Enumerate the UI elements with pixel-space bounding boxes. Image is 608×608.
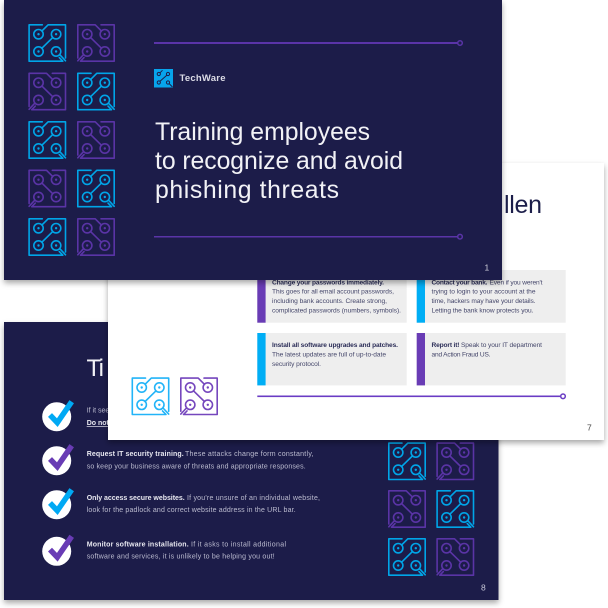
tip 4 text [87,542,286,561]
tip 3 text: If you're unsure of an individual website, [187,495,320,502]
tip 4 text: If it asks to install additional [191,542,286,549]
slide 7 background [108,163,604,440]
top divider with node [154,41,462,45]
brand name: TechWare [180,73,226,84]
tip 2 text [87,451,314,470]
tip 2 text: Request IT security training. [87,451,184,458]
tip 4 text: software and services, it is unlikely to be helping you out! [87,554,275,561]
slide 8 page number: 8 [481,583,486,593]
tip 3 text: Only access secure websites. [87,495,185,502]
panel: slide 1 title [4,0,502,280]
bottom divider with node [154,234,462,239]
slide 8 heading: Ti [86,355,104,382]
card: contact bank: trying to login to your account at the [432,289,536,296]
tip 2 text: These attacks change form constantly, [185,451,314,458]
panel: slide 8 tips [4,322,498,600]
main title: to recognize and avoid [155,148,403,175]
slide 1 page number: 1 [484,263,490,273]
card: install upgrades: Install all software upgrades and patches. [272,342,398,349]
card: change passwords: complicated passwords (numbers, symbols). [272,307,401,314]
slide 7 heading: llen [504,191,542,219]
tip 3 check icon [42,490,72,519]
tip 3 text: look for the padlock and correct website address in the URL bar. [87,507,296,514]
card: install upgrades [257,333,407,385]
main title [155,119,403,204]
tip 4 check icon [42,536,72,566]
tip 2 check icon [42,446,72,475]
tip 2 text: so keep your business aware of threats and appropriate responses. [87,463,306,470]
icon: blue circuit [132,378,169,414]
card: contact bank: Letting the bank know protects you. [432,307,534,314]
card: change passwords: Change your passwords immediately. [272,279,384,286]
slide 8 circuit icon grid [389,443,473,575]
slide 7 page number: 7 [587,423,592,433]
card: report it: Report it! [432,342,460,349]
tip 3 text [87,495,320,514]
card: install upgrades: The latest updates are full of up-to-date [272,352,386,359]
card: report it: and Action Fraud US. [432,352,491,359]
card: change passwords [257,265,407,323]
tip 1 text [87,408,132,427]
slide 1 background [4,0,502,280]
TechWare logo [154,69,173,88]
panel: slide 7 actions [108,163,604,440]
card: report it [417,333,566,385]
tip 1 check icon [42,402,72,431]
tip 1 text: Do not click [87,420,126,427]
card: contact bank: Even if you weren't [490,279,543,286]
card: install upgrades: security protocol. [272,361,321,368]
card: contact bank: time, hackers may have your details. [432,298,536,305]
icon: purple circuit [181,378,217,414]
card: report it: Speak to your IT department [461,342,542,349]
card: contact bank: Contact your bank. [432,279,488,286]
tip 1 text: If it seems odd [87,408,132,414]
tip 4 text: Monitor software installation. [87,542,189,549]
card: contact bank [417,270,566,323]
main title: Training employees [155,119,370,146]
slide 1 circuit icon grid [29,25,114,255]
slide 8 background [4,322,498,600]
main title: phishing threats [155,177,339,204]
card: change passwords: This goes for all email account passwords, [272,289,394,296]
slide 7 divider with node [257,394,565,399]
card: change passwords: including bank accounts. Create strong, [272,298,387,305]
